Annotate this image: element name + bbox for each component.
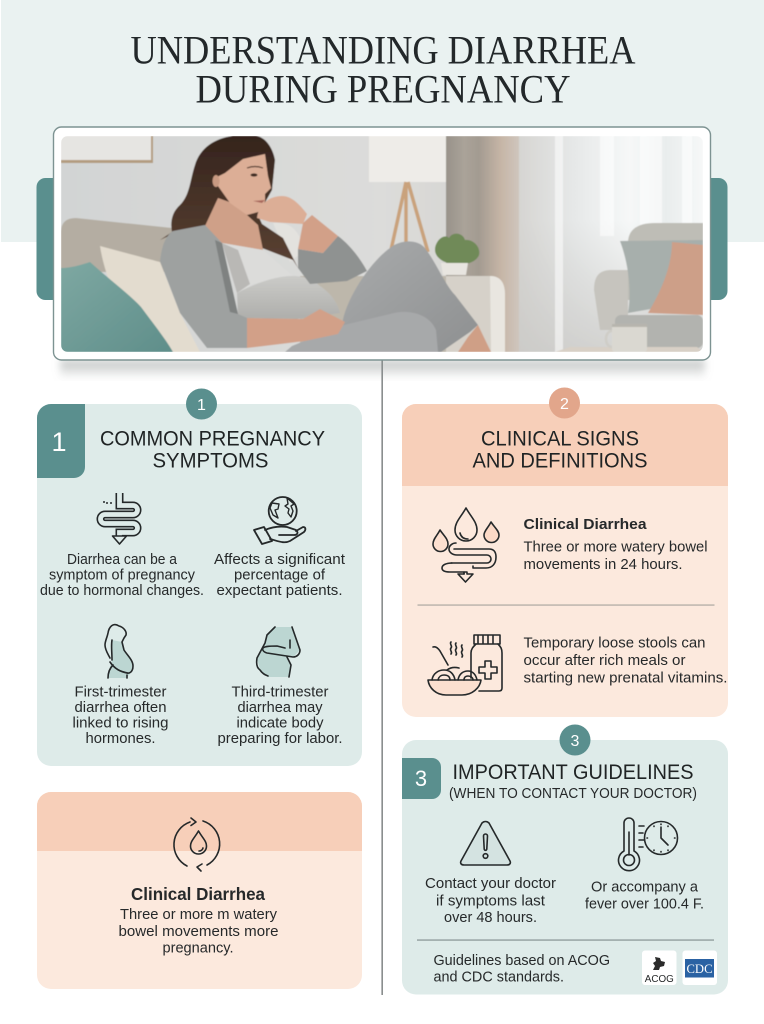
text: guidelines source: Guidelines based on ACOG [434,953,610,969]
text: contact your doctor [425,876,556,926]
logo: ACOG: ACOG [645,974,674,985]
icon: warning triangle [461,822,510,865]
text: third trimester: preparing for labor. [218,731,342,747]
panel 2 heading: AND DEFINITIONS [472,448,648,472]
temporary loose stools text [524,636,728,686]
panel 3 heading [449,760,697,802]
panel 3: important guidelines [402,724,728,994]
logo: ACOG [642,950,676,985]
text: significant percentage: Affects a significant [214,552,345,568]
icon: globe in hand [254,497,305,544]
text: fever: Or accompany a [591,880,699,896]
text: hormonal changes: due to hormonal changes. [40,583,204,599]
icon: drop in cycle arrows [174,818,220,871]
panel 1: common pregnancy symptoms [37,388,362,766]
number tab 3: 3 [415,766,427,791]
text: third trimester [218,684,342,747]
text: fever [585,880,704,912]
clinical diarrhea definition [524,517,708,573]
icon: intestines [100,492,138,544]
card body text: Three or more m watery [120,907,278,923]
text: first trimester: linked to rising [72,716,168,732]
text: third trimester: diarrhea may [238,700,323,716]
panel 2: clinical signs and definitions [402,388,728,717]
step badge 1: 1 [197,397,206,414]
number tab 3 [402,758,441,799]
text: significant percentage [214,552,345,599]
logo: CDC: CDC [686,961,712,976]
header background band [1,0,764,242]
step badge 3 [560,724,590,756]
panel 4: clinical diarrhea summary card [37,792,362,989]
title: UNDERSTANDING DIARRHEA [130,28,636,72]
card header band [37,792,362,851]
icon: third trimester torso [257,627,300,677]
photo: pregnant woman relaxing on a sofa [61,136,703,352]
number tab 1 [37,404,85,478]
icon: water drops and flow arrow [433,508,499,582]
step badge 2: 2 [560,396,569,413]
photo frame shadow [60,360,705,379]
temporary loose stools text: starting new prenatal vitamins. [524,670,728,686]
card heading: Clinical Diarrhea [131,884,265,904]
panel 2 heading [472,426,648,472]
clinical diarrhea definition: Clinical Diarrhea [524,517,648,533]
vertical divider [382,360,383,995]
text: third trimester: Third-trimester [232,684,329,700]
step badge 2 [549,388,580,418]
text: first trimester: First-trimester [74,684,167,700]
step badge 1 [186,388,217,420]
text: third trimester: indicate body [236,716,324,732]
temporary loose stools text: occur after rich meals or [524,653,686,669]
text: first trimester: hormones. [86,731,156,747]
text: contact your doctor: if symptoms last [436,894,545,910]
icon: pregnant silhouette [105,625,133,678]
card body text: bowel movements more [118,924,278,940]
text: hormonal changes: Diarrhea can be a [67,552,178,568]
text: first trimester [72,684,168,747]
text: significant percentage: expectant patients. [216,583,342,599]
clinical diarrhea definition: Three or more watery bowel [524,540,708,556]
number tab 1: 1 [51,427,67,457]
text: first trimester: diarrhea often [74,700,166,716]
panel 3 heading: (WHEN TO CONTACT YOUR DOCTOR) [449,785,697,802]
card body text: pregnancy. [162,940,234,956]
title [130,28,636,112]
icon: thermometer and clock [618,818,678,871]
clinical diarrhea definition: movements in 24 hours. [524,557,682,573]
card body text [118,907,278,956]
left teal side tab [36,178,66,300]
panel 3 heading: IMPORTANT GUIDELINES [452,760,694,784]
text: hormonal changes: symptom of pregnancy [49,568,196,584]
text: guidelines source [434,953,610,986]
temporary loose stools text: Temporary loose stools can [524,636,706,652]
panel 2 header band [402,404,728,486]
panel 2 heading: CLINICAL SIGNS [481,426,639,450]
step badge 3: 3 [571,733,580,750]
icon: food bowl and vitamin bottle [428,635,502,695]
text: hormonal changes [40,552,204,599]
photo frame [54,127,710,360]
text: significant percentage: percentage of [234,568,326,584]
right teal side tab [698,178,728,300]
panel 1 heading: COMMON PREGNANCY [100,426,325,450]
panel 1 heading [100,426,325,472]
text: contact your doctor: Contact your doctor [425,876,556,892]
title: DURING PREGNANCY [196,66,570,112]
text: guidelines source: and CDC standards. [434,970,564,986]
text: contact your doctor: over 48 hours. [444,910,537,926]
panel 1 heading: SYMPTOMS [152,448,268,472]
text: fever: fever over 100.4 F. [585,896,704,912]
logo: CDC [682,950,717,985]
